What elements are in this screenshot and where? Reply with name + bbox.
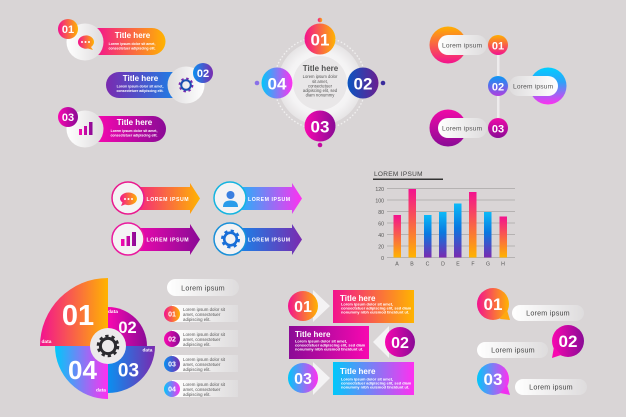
bubble 03	[477, 363, 587, 395]
arrow: blue: LOREM IPSUM	[248, 238, 291, 244]
bubble 02: 02	[559, 332, 577, 351]
item 01	[430, 26, 508, 64]
bubble 01	[477, 288, 584, 321]
pill 02: 02	[197, 68, 209, 80]
legend item 01: 01	[168, 312, 176, 318]
box 01: Lorem ipsum dolor sit amet,	[341, 302, 393, 306]
pill 01	[58, 19, 166, 60]
box 01: Title here	[340, 294, 376, 303]
pill 02: consectetuer adipiscing elit.	[116, 89, 164, 93]
box 02: Lorem ipsum dolor sit amet,	[295, 339, 347, 344]
item 01: Lorem ipsum	[442, 42, 483, 50]
legend item 04: amet, consectetuer	[183, 387, 221, 392]
panel: quadrant pie chart: 03	[118, 360, 139, 382]
legend item 02: adipiscing elit.	[183, 342, 211, 347]
pill 02: Lorem ipsum dolor sit amet,	[117, 84, 163, 88]
legend item 01: adipiscing elit.	[183, 317, 211, 322]
bar chart: E	[456, 262, 460, 268]
legend item 04: 04	[168, 386, 176, 394]
panel: title pills with icons	[58, 19, 213, 148]
pill 01: 01	[62, 24, 74, 36]
legend item 02: amet, consectetuer	[183, 337, 221, 342]
arrow: magenta	[112, 223, 200, 255]
panel: quadrant pie chart	[40, 278, 155, 399]
center text: diam nonummy	[306, 92, 335, 98]
panel: quadrant pie chart: 02	[118, 319, 137, 337]
bar chart: 60	[378, 222, 384, 228]
box 03: Lorem ipsum dolor sit amet,	[341, 377, 393, 382]
bar chart: 80	[378, 210, 384, 216]
badge 02: 02	[354, 74, 372, 94]
badge 04: 04	[268, 74, 287, 94]
bubble 03: Lorem ipsum	[529, 382, 573, 392]
bar chart: 100	[375, 198, 384, 204]
panel: quadrant pie chart: data	[108, 309, 118, 315]
bar chart: D	[441, 262, 445, 268]
box 03: Title here	[340, 367, 376, 376]
legend item 02: Lorem ipsum dolor sit	[183, 332, 226, 337]
pill 03: consectetuer adipiscing elit.	[110, 134, 158, 138]
item 02	[488, 68, 566, 104]
item 01: 01	[492, 40, 504, 52]
arrow: cyan: LOREM IPSUM	[248, 197, 291, 203]
bar chart: C	[426, 262, 430, 268]
legend item 02	[164, 330, 238, 347]
arrow: orange: LOREM IPSUM	[146, 197, 189, 203]
bubble 01: Lorem ipsum	[526, 308, 570, 318]
legend heading: Lorem ipsum	[181, 284, 225, 292]
box 03: nonummy nibh euismod tincidunt ut.	[341, 384, 409, 390]
panel: quadrant pie chart: data	[42, 339, 52, 345]
arrow: orange	[112, 182, 200, 214]
panel: quadrant pie chart: 04	[68, 355, 97, 385]
box 03: 03	[294, 371, 312, 388]
panel: quadrant pie chart: data	[96, 388, 106, 394]
legend item 01: amet, consectetuer	[183, 312, 221, 317]
badge 01: 01	[311, 30, 329, 50]
legend item 01	[164, 305, 238, 322]
item 03: 03	[492, 124, 504, 136]
bar chart: 0	[381, 256, 384, 262]
box 02: nonummy nibh euismod tincidunt ut.	[295, 347, 363, 352]
chart title: LOREM IPSUM	[374, 171, 423, 178]
item 03	[430, 110, 508, 146]
bubble 02	[477, 325, 584, 358]
bar chart: 40	[378, 233, 384, 239]
legend item 03: 03	[168, 362, 176, 368]
bar chart: F	[471, 262, 475, 268]
bar chart: A	[395, 262, 399, 268]
panel: numbered text boxes	[288, 290, 415, 395]
pill 03: Lorem ipsum dolor sit amet,	[111, 129, 157, 133]
box 03	[288, 362, 414, 395]
bar chart: 120	[375, 187, 384, 193]
pill 01: Title here	[115, 31, 151, 40]
box 02: 02	[391, 335, 409, 352]
legend item 03: Lorem ipsum dolor sit	[183, 357, 226, 362]
box 01: 01	[294, 299, 312, 316]
arrow: magenta: LOREM IPSUM	[146, 238, 189, 244]
panel: legend list	[164, 279, 239, 397]
pill 03	[58, 107, 166, 148]
bar chart: H	[501, 262, 505, 268]
box 03: consectetuer adipiscing elit, sed diam	[341, 380, 412, 386]
pill 01: consectetuer adipiscing elit.	[108, 46, 156, 50]
center text: consectetuer	[308, 84, 333, 88]
legend item 03: amet, consectetuer	[183, 362, 221, 367]
pill 01: Lorem ipsum dolor sit amet,	[109, 42, 155, 46]
box 02: Title here	[295, 330, 331, 339]
badge 03: 03	[311, 118, 329, 136]
center text: Lorem ipsum dolor	[303, 74, 338, 79]
panel: quadrant pie chart: data	[142, 348, 153, 354]
pill 03: Title here	[117, 118, 153, 127]
bar chart: G	[486, 262, 490, 268]
legend item 01: Lorem ipsum dolor sit	[183, 307, 226, 312]
bubble 02: Lorem ipsum	[491, 346, 535, 354]
box 02	[289, 326, 415, 359]
legend item 04: Lorem ipsum dolor sit	[183, 382, 226, 387]
bar chart	[373, 171, 515, 268]
panel: arrow banners	[112, 182, 302, 255]
arrow: cyan	[214, 182, 302, 214]
center text	[303, 64, 339, 98]
panel: quadrant pie chart: 01	[62, 300, 94, 332]
bubble 01: 01	[484, 295, 502, 314]
panel: speech bubbles	[477, 288, 587, 395]
legend item 03: adipiscing elit.	[183, 367, 211, 372]
center text: sit amet,	[312, 79, 328, 84]
pill 02	[106, 63, 213, 104]
bar chart: B	[410, 262, 414, 268]
item 03: Lorem ipsum	[442, 126, 483, 132]
box 01: nonummy nibh euismod tincidunt ut.	[341, 310, 409, 314]
box 01: consectetuer adipiscing elit, sed diam	[341, 306, 412, 310]
arrow: blue	[214, 223, 302, 255]
pill 03: 03	[62, 112, 74, 124]
item 02: 02	[492, 82, 504, 94]
icon: gear	[98, 336, 118, 356]
item 02: Lorem ipsum	[513, 84, 554, 90]
center text: adipiscing elit, sed	[303, 88, 338, 93]
panel: connected timeline	[430, 26, 566, 146]
bubble 03: 03	[484, 370, 502, 389]
legend item 03	[164, 355, 238, 372]
panel: circular diagram	[255, 18, 385, 147]
bar chart: 20	[378, 244, 384, 250]
legend item 02: 02	[168, 336, 176, 344]
legend item 04: adipiscing elit.	[183, 392, 211, 397]
legend item 04	[164, 380, 238, 397]
pill 02: Title here	[123, 74, 159, 83]
box 02: consectetuer adipiscing elit, sed diam	[295, 343, 366, 348]
center text: Title here	[303, 64, 339, 73]
box 01	[288, 290, 414, 323]
